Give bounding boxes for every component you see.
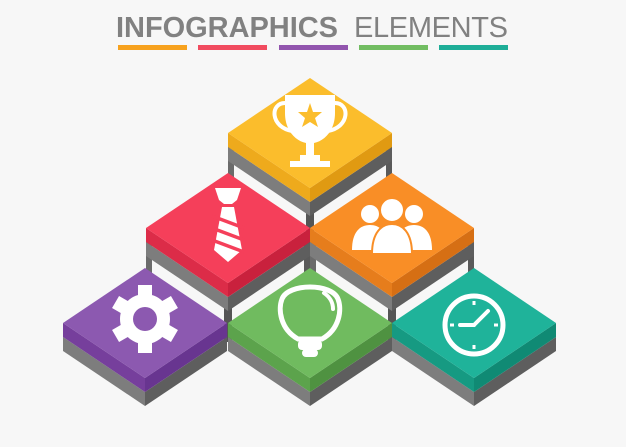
tile: orange team	[310, 173, 474, 342]
icon: clock	[445, 296, 503, 354]
title	[116, 12, 508, 44]
title: ELEMENTS	[354, 12, 508, 44]
tile: yellow trophy	[228, 78, 392, 262]
icon: trophy	[275, 95, 345, 167]
icon: people	[352, 198, 432, 254]
tile: teal clock	[392, 268, 556, 406]
title: INFOGRAPHICS	[116, 12, 338, 44]
icon: light bulb	[280, 287, 340, 357]
tile: red tie	[146, 173, 310, 342]
icon: tie	[212, 188, 244, 262]
tile: purple gear	[63, 268, 227, 406]
tile: green bulb	[228, 268, 392, 406]
icon: gear	[112, 285, 178, 353]
color underlines	[118, 45, 508, 50]
